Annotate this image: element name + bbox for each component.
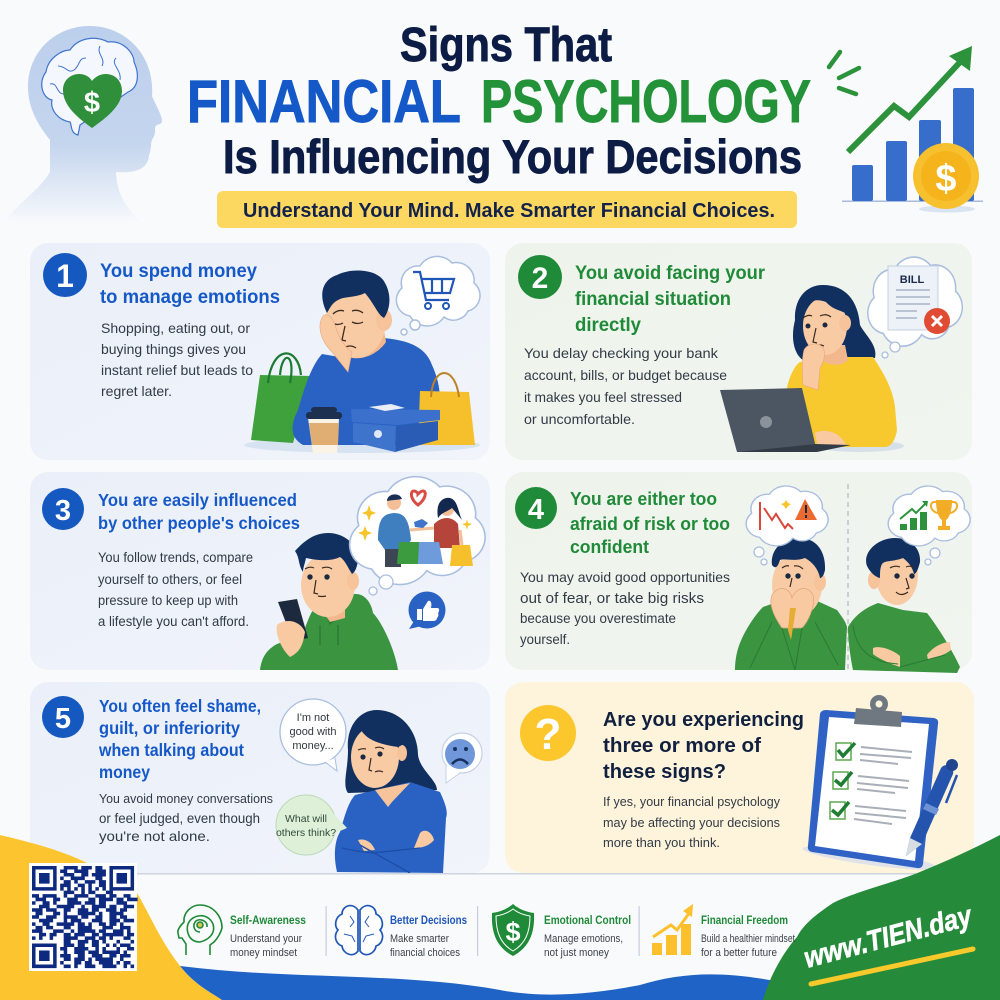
heading 2: financial situation (575, 289, 731, 310)
heading 2: You avoid facing your (575, 263, 766, 284)
speech bubble: not good with money: good with (289, 726, 337, 738)
body text 1: buying things gives you (101, 341, 246, 357)
body text 1: Shopping, eating out, or (101, 320, 250, 336)
label: financial freedom: Build a healthier mindset (701, 933, 795, 945)
badge 1: 1 (56, 258, 74, 294)
thought bubble: growth and trophy (888, 486, 970, 565)
label: better decisions: financial choices (390, 947, 460, 959)
divider 1 (326, 906, 327, 956)
green shopping bag (251, 353, 312, 443)
heading 5: when talking about (98, 740, 244, 760)
heading 3: by other people's choices (98, 513, 300, 533)
panel 5: shame and guilt (30, 682, 490, 873)
benefit: self-awareness (178, 905, 306, 959)
subtitle banner: Understand Your Mind. Make Smarter Financial Choices. (243, 200, 775, 222)
heading 3: You are easily influenced (98, 490, 297, 510)
benefit: emotional control (492, 904, 631, 959)
illustration: worried woman at laptop (720, 257, 962, 452)
badge 1 (43, 253, 87, 297)
body text 5 (99, 791, 273, 844)
label: better decisions: Make smarter (390, 933, 449, 945)
heading 3 (98, 490, 300, 533)
badge 3: 3 (55, 495, 71, 527)
label: self-awareness (230, 913, 306, 959)
icon: head with spiral (178, 905, 222, 955)
footer wave: green with website (763, 835, 1000, 1000)
footer base line (137, 873, 1000, 874)
pen (906, 759, 958, 856)
checklist rows (830, 743, 912, 824)
icon: shield with dollar: $ (505, 917, 521, 947)
heading 6: three or more of (603, 734, 761, 757)
body text 1: instant relief but leads to (101, 362, 253, 378)
heading 1: You spend money (100, 261, 257, 282)
brain (42, 38, 137, 135)
title: FINANCIAL (187, 68, 461, 135)
label: self-awareness: Self-Awareness (230, 913, 306, 927)
benefit: better decisions (335, 906, 467, 959)
benefit: financial freedom (652, 904, 795, 959)
heading 6: these signs? (603, 760, 726, 783)
sad face bubble (442, 733, 482, 783)
illustration: clipboard checklist and pen (802, 695, 958, 874)
body text 5: or feel judged, even though (99, 811, 260, 826)
label: self-awareness: Understand your (230, 933, 302, 945)
body text 6: may be affecting your decisions (603, 815, 780, 830)
heading 5: guilt, or inferiority (99, 718, 240, 738)
body text 3 (98, 549, 253, 629)
label: financial freedom: Financial Freedom (701, 913, 788, 927)
body text 5: You avoid money conversations (99, 791, 273, 806)
badge 2 (518, 255, 562, 299)
body text 1 (101, 320, 253, 399)
label: financial freedom: for a better future (701, 947, 777, 959)
label: better decisions: Better Decisions (390, 913, 467, 927)
illustration: tired man with shopping bags (244, 256, 480, 453)
panel 1: spending to manage emotions (30, 243, 490, 460)
illustration: man with phone in hoodie (260, 477, 485, 670)
heading 2: directly (575, 315, 641, 336)
heading 2 (575, 263, 766, 336)
question badge (520, 705, 576, 761)
heading 5: You often feel shame, (99, 696, 261, 716)
divider 2 (477, 906, 478, 956)
heading 4: confident (570, 537, 649, 557)
body text 3: a lifestyle you can't afford. (98, 613, 249, 629)
heading 6 (603, 708, 804, 783)
heading 1 (100, 261, 280, 308)
body text 2: or uncomfortable. (524, 411, 635, 427)
yellow shopping bag (418, 373, 475, 445)
icon: rising bars (652, 904, 693, 955)
speech bubble: what will others think: others think? (276, 827, 336, 839)
label: emotional control: not just money (544, 947, 609, 959)
heading 5 (98, 696, 261, 782)
header illustration: head with brain and heart (5, 26, 162, 222)
QR code (29, 863, 138, 971)
heading 4: afraid of risk or too (570, 514, 730, 534)
thought bubble with bill: BILL (900, 274, 924, 286)
heart with dollar (63, 74, 122, 128)
body text 2: You delay checking your bank (524, 345, 719, 361)
laptop (720, 388, 851, 452)
badge 4 (515, 487, 557, 529)
header illustration: growth chart and coin: $ (935, 158, 957, 200)
illustration: ashamed woman (276, 699, 482, 873)
heading 5: money (99, 762, 150, 782)
body text 5: you're not alone. (99, 828, 210, 844)
body text 6: If yes, your financial psychology (603, 794, 780, 809)
header illustration: growth chart and coin (829, 46, 983, 212)
thought bubble with bill (868, 257, 962, 358)
body text 4: yourself. (520, 631, 570, 647)
body text 1: regret later. (101, 383, 172, 399)
thought bubble with friends shopping (350, 477, 485, 595)
heading 4 (570, 489, 730, 557)
divider: fear versus confidence (847, 484, 849, 670)
body text 2 (524, 345, 727, 427)
label: financial freedom (701, 913, 795, 959)
header illustration: head with brain and heart: $ (84, 87, 100, 119)
thought bubble with cart (396, 256, 480, 335)
thought bubble: falling chart and warning (746, 486, 828, 565)
body text 4: You may avoid good opportunities (520, 569, 730, 585)
body text 6 (603, 794, 780, 850)
body text 4 (520, 569, 730, 647)
speech bubble: what will others think: What will (285, 813, 327, 825)
body text 3: yourself to others, or feel (98, 571, 242, 587)
panel 4: risk attitudes (505, 472, 972, 673)
title: Is Influencing Your Decisions (223, 130, 802, 183)
heading 4: You are either too (570, 489, 717, 509)
body text 2: it makes you feel stressed (524, 389, 682, 405)
speech bubble: not good with money (280, 699, 346, 771)
subtitle banner (217, 191, 797, 228)
body text 4: because you overestimate (520, 610, 676, 626)
speech bubble: what will others think (276, 795, 347, 855)
badge 5: 5 (55, 703, 71, 735)
speech bubble: not good with money: I'm not (297, 712, 329, 724)
like bubble (408, 592, 446, 629)
label: better decisions (390, 913, 467, 959)
heading 1: to manage emotions (100, 287, 280, 308)
badge 3 (42, 488, 84, 530)
title: PSYCHOLOGY (481, 68, 811, 135)
illustration: confident man (848, 486, 970, 673)
heading 6: Are you experiencing (603, 708, 804, 731)
coffee cup (306, 407, 342, 453)
phone (277, 599, 308, 657)
panel 3: influenced by others (30, 472, 490, 670)
badge 2: 2 (532, 262, 548, 295)
label: emotional control: Emotional Control (544, 913, 631, 927)
footer wave: yellow (0, 835, 222, 1000)
title (187, 19, 811, 183)
badge 4: 4 (528, 494, 544, 526)
footer wave: blue (180, 966, 780, 1000)
body text 2: account, bills, or budget because (524, 367, 727, 383)
label: emotional control (544, 913, 631, 959)
label: self-awareness: money mindset (230, 947, 297, 959)
body text 3: You follow trends, compare (98, 549, 253, 565)
illustration: anxious man (735, 486, 847, 670)
icon: brain (335, 906, 383, 955)
panel 2: avoiding financial situation (505, 243, 972, 460)
body text 6: more than you think. (603, 835, 720, 850)
divider 3 (638, 906, 640, 956)
clipboard clip (854, 695, 902, 727)
badge 5 (42, 696, 84, 738)
title: Signs That (400, 19, 612, 72)
question badge: ? (535, 710, 561, 759)
blue gift box (351, 404, 440, 452)
panel 6: self-check question (505, 682, 974, 874)
footer wave: green with website: www.TIEN.day (801, 900, 977, 975)
body text 3: pressure to keep up with (98, 592, 238, 608)
speech bubble: not good with money: money... (292, 740, 334, 752)
body text 4: out of fear, or take big risks (520, 590, 704, 607)
label: emotional control: Manage emotions, (544, 933, 623, 945)
